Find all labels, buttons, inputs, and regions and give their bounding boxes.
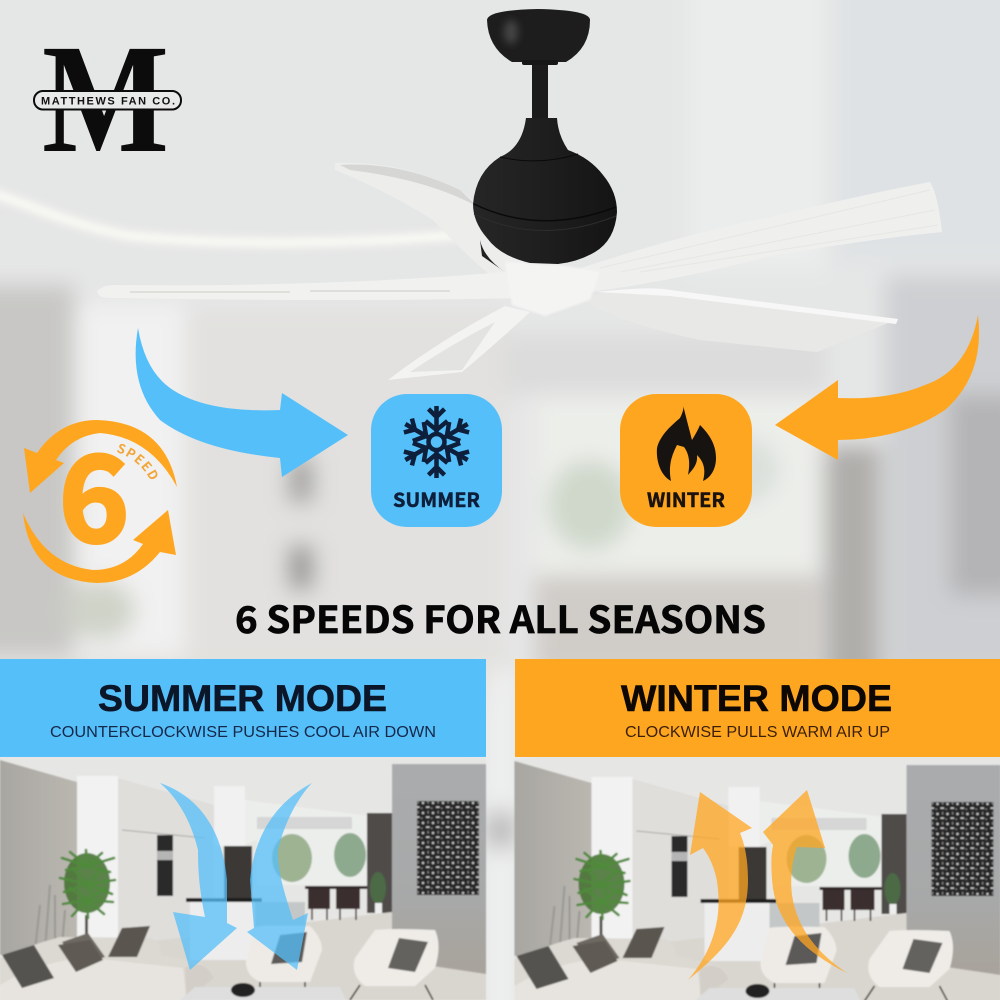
winter room photo	[514, 759, 1000, 1000]
ceiling fan	[97, 9, 942, 380]
logo: Matthews Fan Co.: MATTHEWS FAN CO.	[41, 96, 175, 108]
summer heading: SUMMER MODE	[98, 678, 387, 719]
badge: 6 speed: SPEED	[117, 444, 158, 480]
icon: snowflake	[400, 406, 473, 478]
winter banner	[515, 659, 1000, 757]
airflow arrows down	[160, 783, 312, 970]
ceiling light strip	[0, 192, 470, 243]
heading: 6 SPEEDS FOR ALL SEASONS	[235, 590, 766, 644]
canopy and downrod	[487, 9, 590, 122]
bottom arc arrow	[23, 510, 176, 583]
winter heading: WINTER MODE	[621, 678, 892, 719]
motor housing	[473, 118, 617, 272]
airflow arrows up	[688, 790, 847, 980]
label: summer: SUMMER	[393, 484, 480, 513]
fan blades	[97, 163, 942, 380]
summer banner	[0, 659, 486, 757]
panel: winter mode	[514, 659, 1000, 1000]
summer subheading: COUNTERCLOCKWISE PUSHES COOL AIR DOWN	[50, 724, 436, 741]
arrow: blue to summer	[136, 328, 348, 477]
panel: summer mode	[0, 659, 486, 1000]
icon: flame	[657, 405, 716, 481]
logo: Matthews Fan Co.: M	[42, 12, 169, 185]
summer room photo	[0, 758, 486, 1000]
label: winter: WINTER	[647, 484, 725, 513]
arrow: orange to winter	[775, 315, 979, 460]
numeral 6: 6	[59, 403, 129, 577]
icon: summer tile	[371, 394, 502, 527]
top arc arrow	[24, 420, 177, 493]
winter subheading: CLOCKWISE PULLS WARM AIR UP	[625, 724, 890, 741]
badge: 6 speed	[23, 403, 177, 583]
icon: winter tile	[620, 394, 752, 527]
label: speed	[116, 452, 156, 499]
